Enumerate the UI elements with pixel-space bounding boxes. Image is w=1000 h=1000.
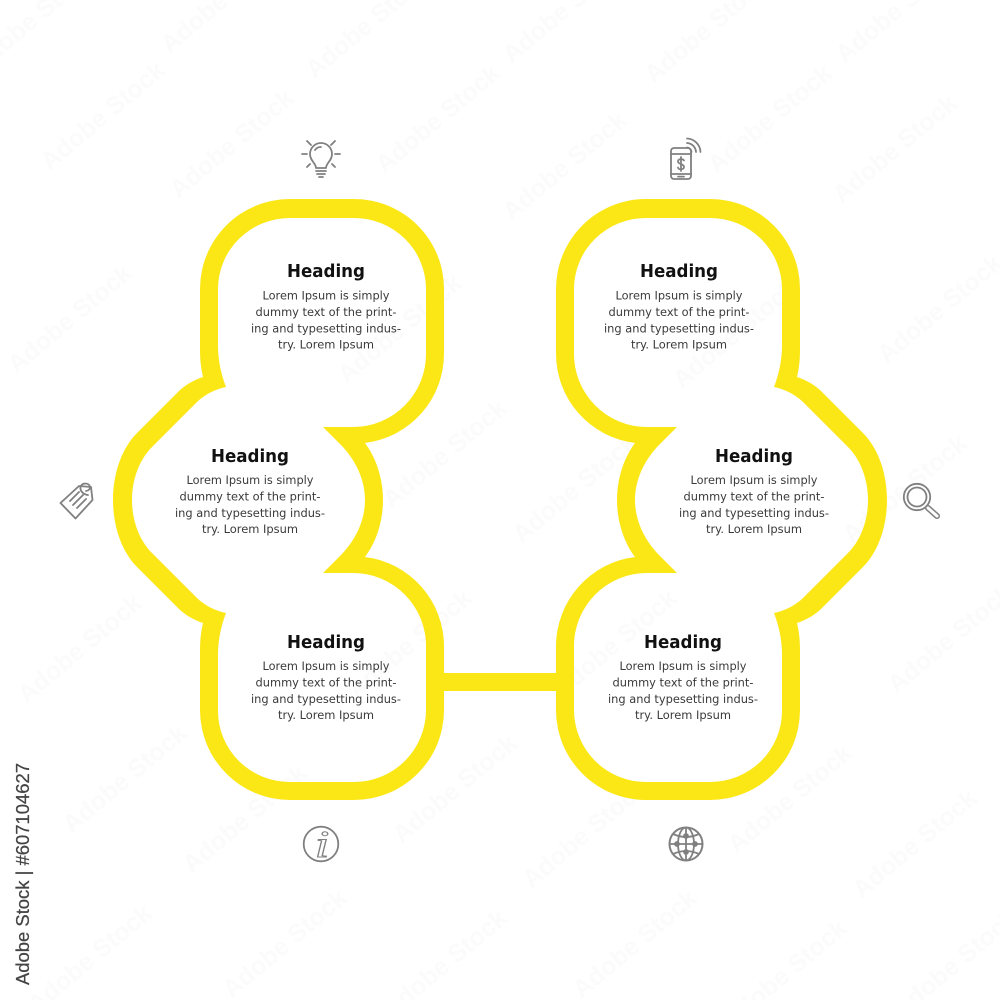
icon: info: i (315, 823, 329, 865)
watermark pattern: Adobe Stock (12, 589, 147, 709)
body text (175, 474, 325, 536)
left yellow outline shape (113, 199, 444, 800)
heading: Heading (211, 447, 289, 467)
panel: bottom left (251, 633, 401, 722)
body text: Lorem Ipsum is simply (620, 660, 747, 673)
icon: info (304, 823, 338, 865)
watermark pattern: Adobe Stock (332, 269, 467, 389)
panel: bottom right (608, 633, 758, 722)
body text: dummy text of the print- (256, 676, 396, 690)
stock image credit: Adobe Stock | #607104627 (13, 763, 33, 985)
icon: light bulb (302, 141, 340, 177)
icon: price tag (60, 484, 92, 518)
watermark pattern: Adobe Stock (722, 739, 857, 859)
body text: dummy text of the print- (180, 490, 320, 504)
body text (251, 660, 401, 722)
watermark pattern: Adobe Stock (497, 106, 632, 226)
body text (679, 474, 829, 536)
body text (608, 660, 758, 722)
body text: try. Lorem Ipsum (635, 709, 731, 722)
body text: ing and typesetting indus- (604, 322, 754, 336)
watermark pattern: Adobe Stock (387, 729, 522, 849)
connector bar (443, 673, 557, 691)
heading: Heading (640, 262, 718, 282)
body text: Lorem Ipsum is simply (616, 290, 743, 302)
icon: magnifying glass (904, 484, 937, 516)
body text: ing and typesetting indus- (608, 693, 758, 706)
watermark pattern: Adobe Stock (517, 774, 652, 894)
body text: Lorem Ipsum is simply (690, 474, 818, 487)
body text: try. Lorem Ipsum (631, 338, 727, 352)
body text (604, 290, 754, 352)
right yellow outline shape (556, 199, 887, 800)
heading: Heading (715, 447, 793, 467)
panel: middle left (175, 447, 325, 536)
body text: Lorem Ipsum is simply (262, 660, 390, 673)
body text: try. Lorem Ipsum (278, 338, 374, 352)
watermark pattern: Adobe Stock (547, 584, 682, 704)
watermark pattern: Adobe Stock (377, 394, 512, 514)
body text: try. Lorem Ipsum (202, 523, 298, 536)
panel: top left (251, 262, 401, 352)
watermark pattern: Adobe Stock (35, 56, 170, 176)
watermark pattern: Adobe Stock (370, 59, 505, 179)
body text (251, 290, 401, 352)
watermark pattern: Adobe Stock (342, 584, 477, 704)
panel: top right (604, 262, 754, 352)
watermark pattern: Adobe Stock (827, 89, 962, 209)
body text: dummy text of the print- (684, 490, 824, 504)
watermark pattern: Adobe Stock (667, 274, 802, 394)
body text: ing and typesetting indus- (251, 322, 401, 336)
icon: globe (670, 828, 702, 860)
body text: Lorem Ipsum is simply (186, 474, 314, 487)
heading: Heading (644, 633, 722, 653)
watermark pattern: Adobe Stock (702, 59, 837, 179)
watermark pattern: Adobe Stock (847, 784, 982, 904)
body text: Lorem Ipsum is simply (262, 290, 390, 302)
watermark pattern: Adobe Stock (507, 429, 642, 549)
body text: dummy text of the print- (256, 306, 396, 319)
body text: ing and typesetting indus- (679, 507, 829, 520)
watermark pattern: Adobe Stock (164, 84, 299, 204)
icon: mobile phone with dollar (671, 138, 700, 179)
watermark pattern: Adobe Stock (837, 429, 972, 549)
watermark pattern: Adobe Stock (57, 719, 192, 839)
watermark pattern: Adobe Stock (2, 259, 137, 379)
heading: Heading (287, 633, 365, 653)
body text: ing and typesetting indus- (175, 507, 325, 520)
body text: ing and typesetting indus- (251, 693, 401, 706)
watermark pattern: Adobe Stock (177, 759, 312, 879)
body text: dummy text of the print- (612, 676, 754, 690)
body text: dummy text of the print- (608, 306, 750, 319)
heading: Heading (287, 262, 365, 282)
body text: try. Lorem Ipsum (278, 709, 374, 722)
panel: middle right (679, 447, 829, 536)
body text: try. Lorem Ipsum (706, 523, 802, 536)
